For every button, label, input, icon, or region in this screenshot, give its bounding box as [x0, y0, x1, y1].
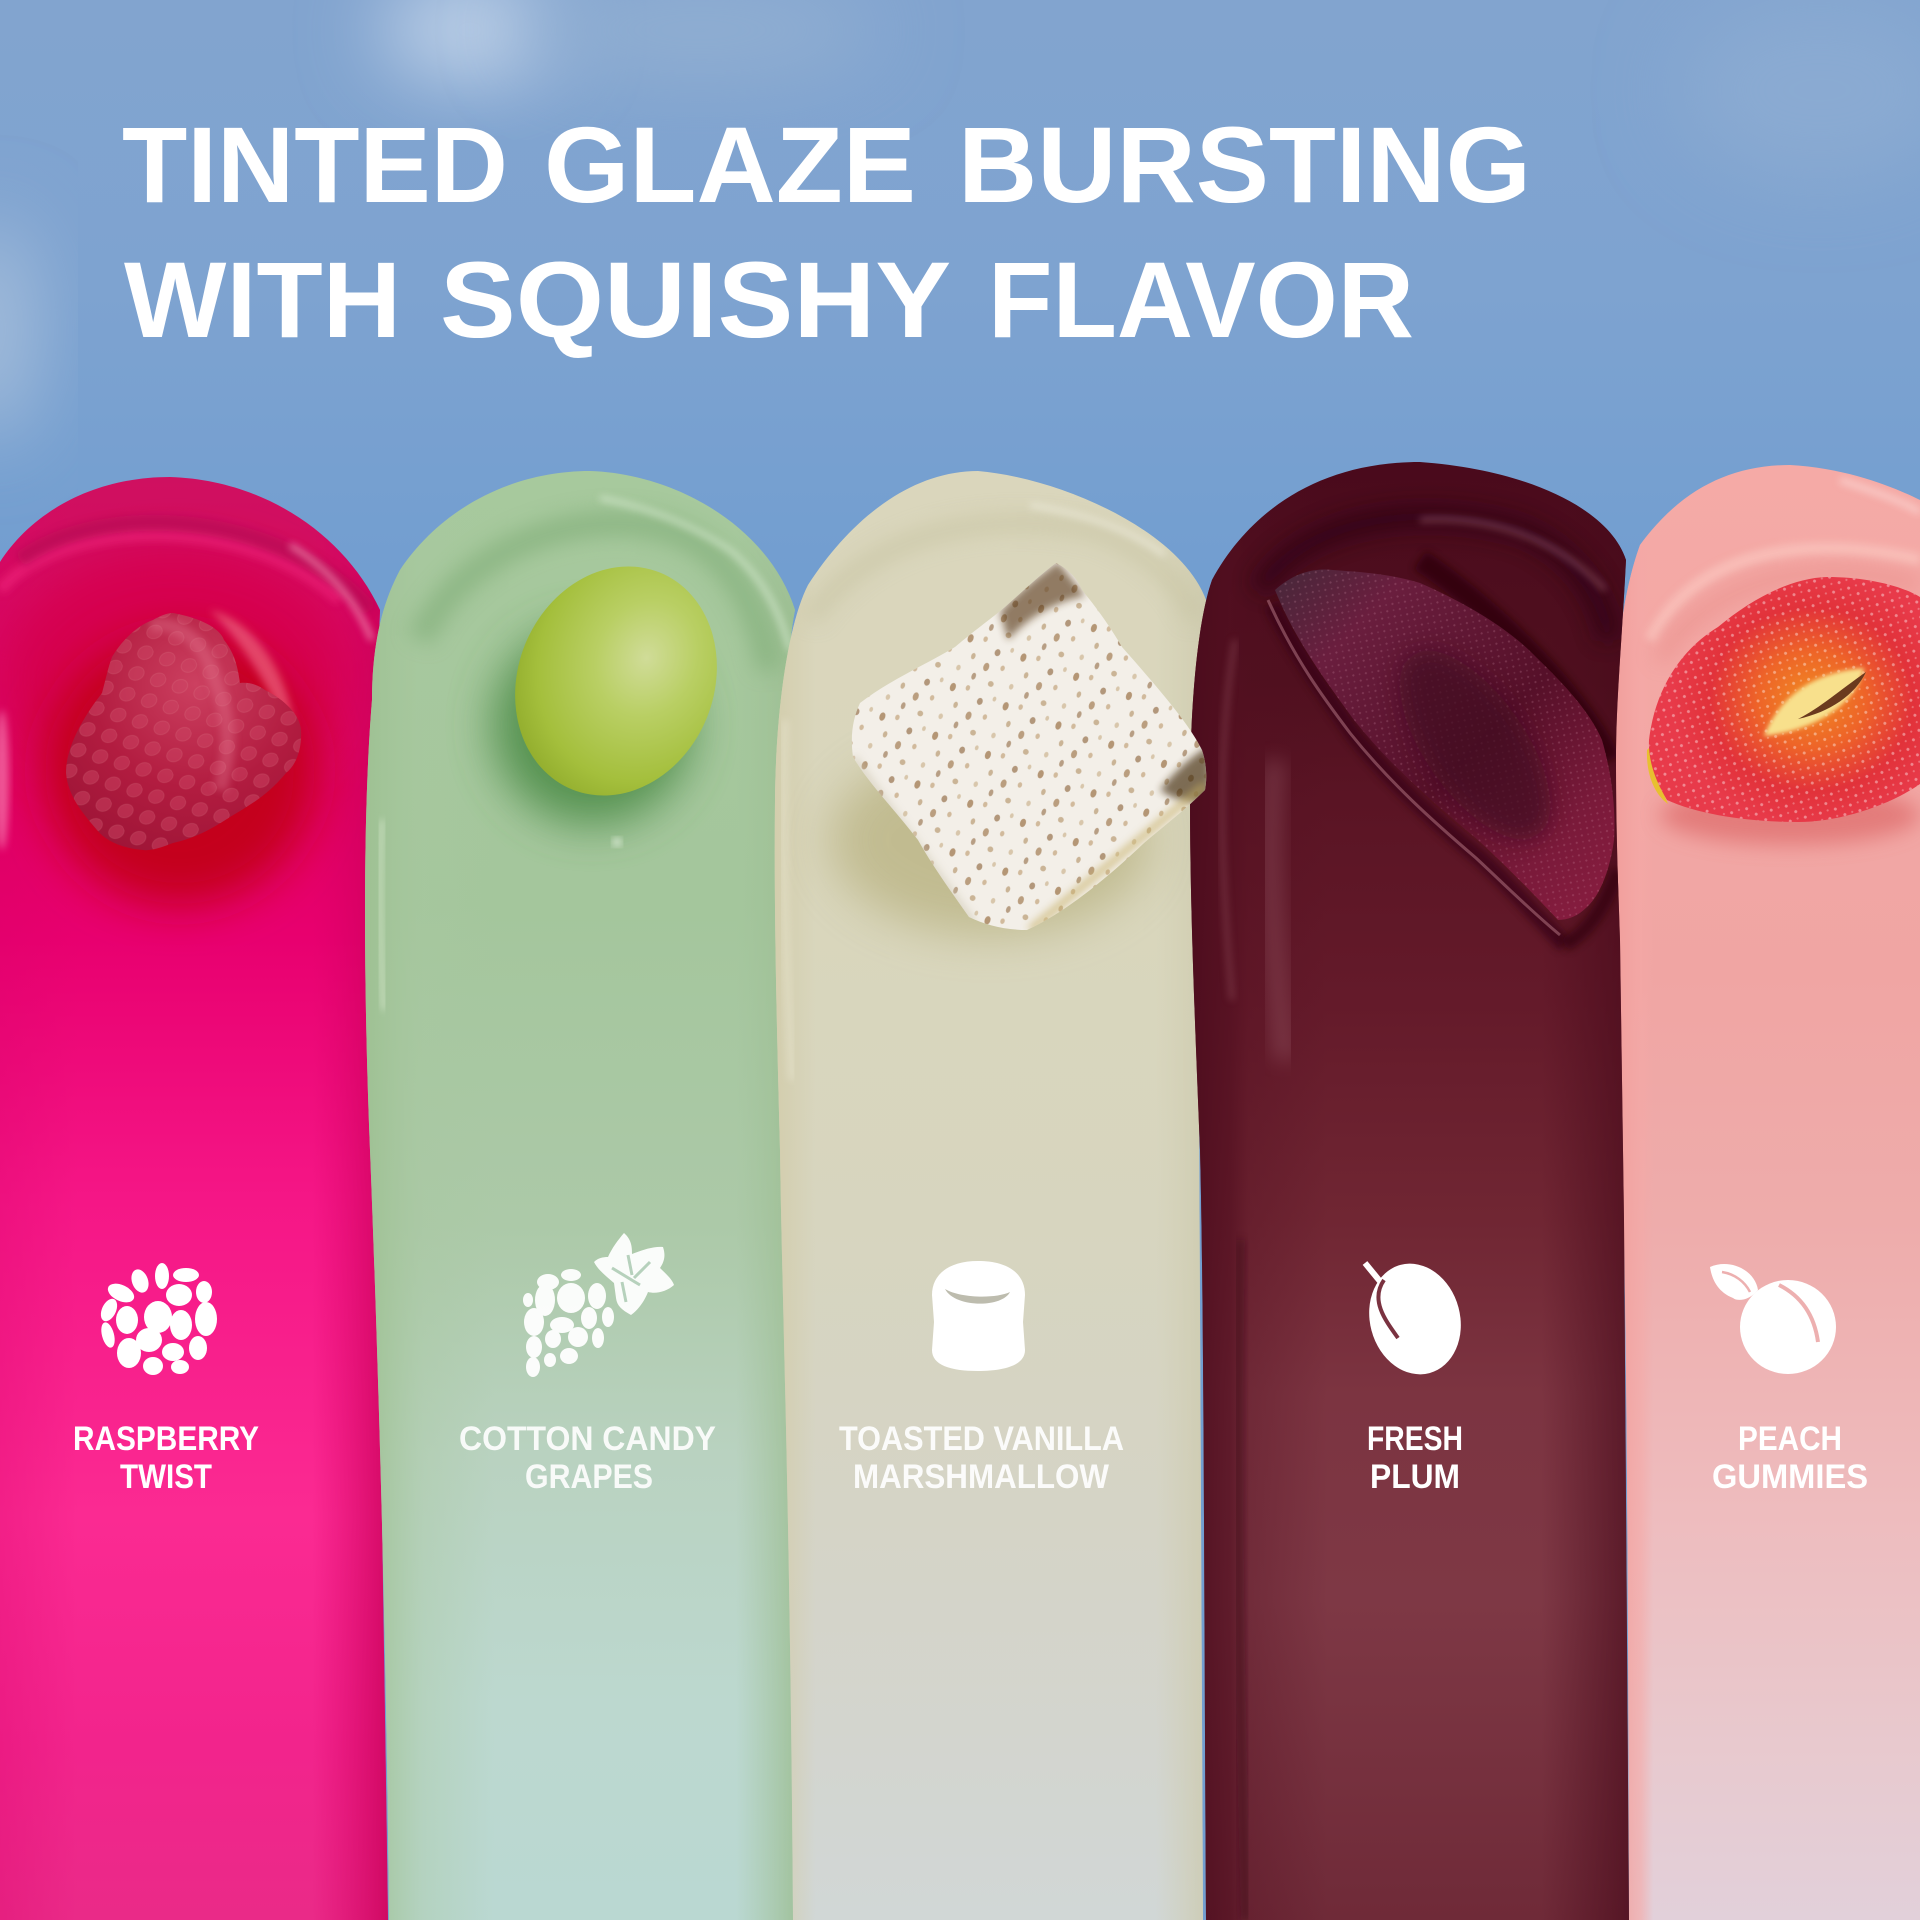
icon: peach: [1710, 1264, 1836, 1374]
title: FLAVOR: [988, 239, 1414, 360]
label: fresh plum: PLUM: [1370, 1458, 1460, 1496]
title: WITH: [124, 239, 401, 360]
panel: toasted vanilla marshmallow swatch: [772, 470, 1208, 1920]
label: raspberry twist: TWIST: [120, 1458, 212, 1496]
label: fresh plum: FRESH: [1367, 1420, 1463, 1458]
title: BURSTING: [958, 104, 1531, 225]
title: TINTED: [122, 104, 508, 225]
label: fresh plum: [1367, 1420, 1463, 1496]
icon: green grape: [481, 536, 751, 826]
label: toasted vanilla marshmallow: MARSHMALLOW: [853, 1458, 1110, 1496]
label: peach gummies: PEACH: [1738, 1420, 1842, 1458]
panel: peach gummies swatch: [1610, 460, 1920, 1920]
icon: peach gummy: [1640, 570, 1920, 830]
icon: grape cluster with leaf: [523, 1233, 674, 1377]
label: toasted vanilla marshmallow: TOASTED VANILLA: [839, 1420, 1124, 1458]
title: GLAZE: [544, 104, 916, 225]
label: peach gummies: [1712, 1420, 1868, 1496]
icon: plum wedge: [1270, 565, 1620, 925]
label: cotton candy grapes: GRAPES: [525, 1458, 653, 1496]
panel: fresh plum swatch: [1186, 460, 1630, 1920]
icon: raspberry: [98, 1263, 217, 1375]
icon: marshmallow: [932, 1261, 1025, 1371]
label: peach gummies: GUMMIES: [1712, 1458, 1868, 1496]
title: SQUISHY: [440, 239, 950, 360]
label: raspberry twist: [73, 1420, 259, 1496]
icon: raspberry fruit: [66, 613, 301, 850]
label: raspberry twist: RASPBERRY: [73, 1420, 259, 1458]
title: [122, 104, 1531, 360]
label: cotton candy grapes: COTTON CANDY: [459, 1420, 716, 1458]
panel: raspberry twist swatch: [0, 470, 390, 1920]
panel: cotton candy grapes swatch: [362, 470, 802, 1920]
icon: toasted marshmallow: [850, 560, 1210, 935]
icon: plum: [1357, 1253, 1473, 1385]
label: toasted vanilla marshmallow: [839, 1420, 1124, 1496]
label: cotton candy grapes: [459, 1420, 716, 1496]
